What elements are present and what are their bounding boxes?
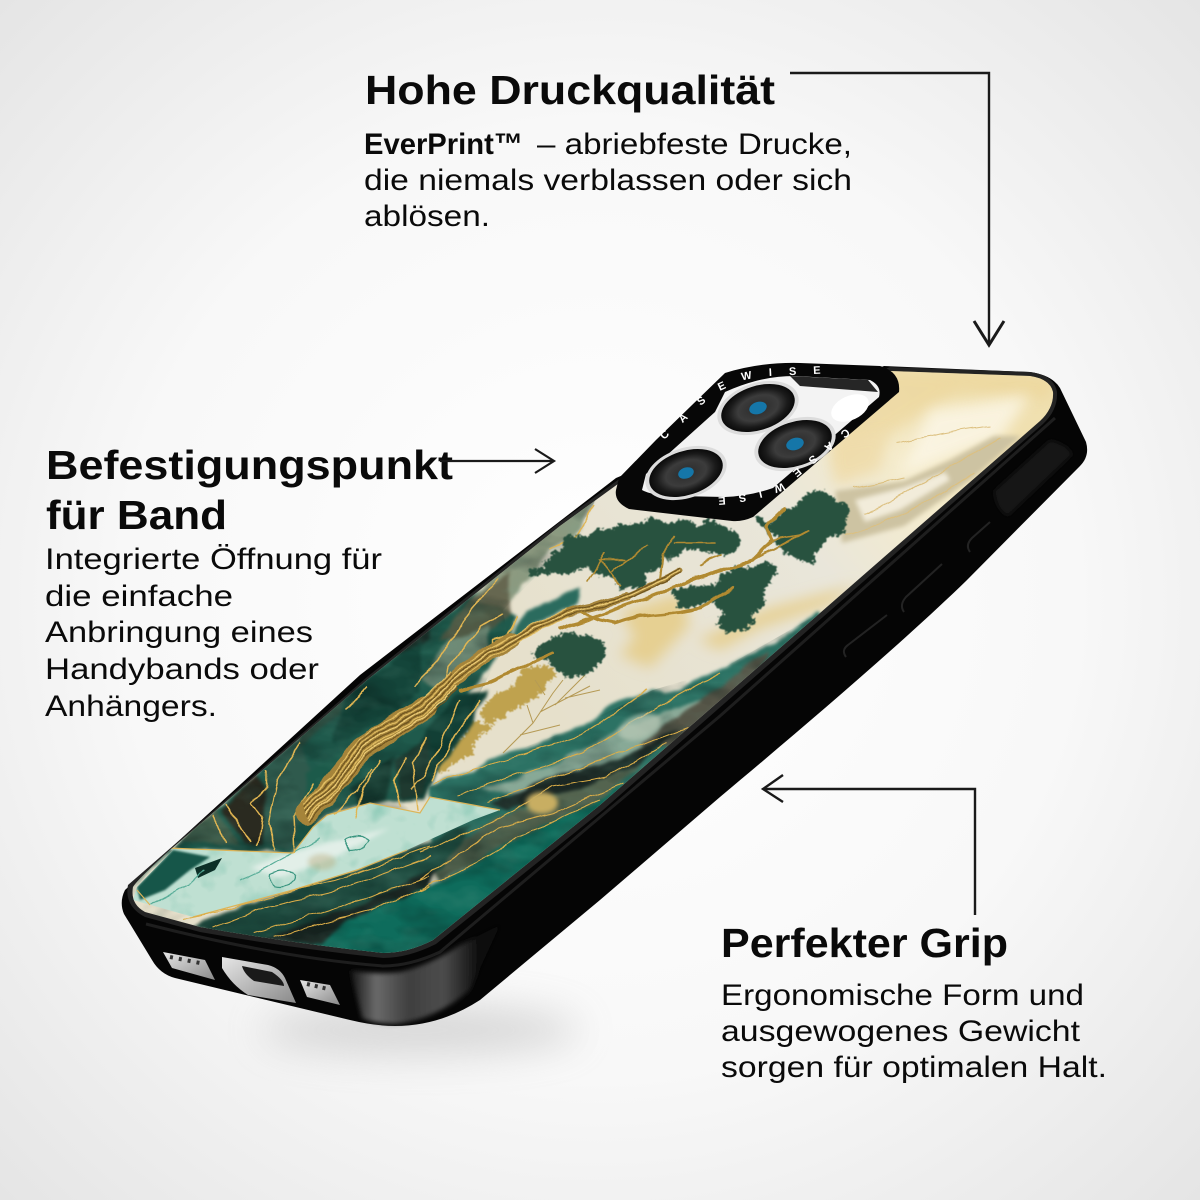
text block: band attachment description: die einfache <box>45 580 233 613</box>
text block: band attachment description: Handybands oder <box>45 653 319 686</box>
sage hill <box>480 698 702 796</box>
gold bare tree <box>503 675 600 753</box>
charging port <box>222 957 296 1003</box>
text block: EverPrint description: EverPrint™ <box>364 128 523 161</box>
rim bevel highlight <box>146 418 1055 966</box>
camera module <box>616 362 900 522</box>
brown hill <box>640 650 770 745</box>
phone face artwork <box>120 360 1070 970</box>
lens 3 <box>638 436 734 510</box>
sage ridge <box>420 625 490 690</box>
brand text top: CASEWISE <box>660 366 820 438</box>
olive peak upper <box>470 501 595 608</box>
brand text path top <box>664 373 835 440</box>
speaker grille right <box>300 980 340 1005</box>
text block: grip description: Ergonomische Form und <box>721 979 1084 1012</box>
teal lake <box>400 690 490 803</box>
tree foliage <box>530 488 849 677</box>
dark brown triangles <box>222 775 270 848</box>
speaker grille left <box>163 952 215 980</box>
river gold lines <box>183 673 720 937</box>
camera bezel <box>616 363 899 521</box>
heading: Perfekter Grip: Perfekter Grip <box>721 920 1008 966</box>
watercolor texture <box>132 500 810 953</box>
cream sky <box>120 360 1070 960</box>
gold wash patches right <box>620 584 860 668</box>
distant mountain marble <box>835 426 1021 543</box>
hill top band <box>430 612 822 850</box>
mountain base <box>133 590 519 890</box>
teal foreground <box>291 786 622 953</box>
lens 1 <box>710 371 806 445</box>
gold blot <box>526 792 558 814</box>
teal sliver <box>508 588 580 640</box>
mint band gold border <box>137 797 500 917</box>
lens 2 <box>747 407 843 481</box>
text block: band attachment description: Anbringung eines <box>45 616 313 649</box>
sage pebble <box>616 710 663 742</box>
text block: grip description: ausgewogenes Gewicht <box>721 1015 1081 1048</box>
canopy right <box>749 488 849 562</box>
text block: grip description <box>721 979 1107 1084</box>
gold wash left patches <box>431 664 557 777</box>
shadow under phone <box>260 1006 580 1054</box>
text block: band attachment description: Integrierte Öffnung für <box>45 543 382 576</box>
arrow: print quality to phone top <box>790 73 1004 345</box>
arrow: grip to phone side <box>763 775 975 915</box>
text block: EverPrint description <box>364 128 852 233</box>
text block: EverPrint description: – abriebfeste Drucke, <box>537 128 852 161</box>
camera window <box>642 376 880 497</box>
gold glow upper corner <box>840 371 1053 444</box>
hill band behind cream boundary <box>192 609 822 953</box>
arrow: band attachment to camera <box>440 449 554 473</box>
canopy left <box>530 519 742 593</box>
text block: band attachment description: Anhängers. <box>45 690 217 723</box>
deep green <box>335 640 420 745</box>
text block: EverPrint description: die niemals verblassen oder sich <box>364 164 852 197</box>
inner wall shadow <box>790 376 878 392</box>
dark band mid <box>260 868 440 945</box>
phone <box>122 362 1088 1028</box>
brand text path bottom <box>672 428 846 498</box>
gold contour lines <box>212 505 595 853</box>
side buttons <box>844 522 990 657</box>
text block: grip description: sorgen für optimalen Halt. <box>721 1051 1107 1084</box>
case rim <box>127 367 1057 958</box>
strap slot <box>994 440 1072 516</box>
dark shade upper <box>398 629 432 656</box>
text block: band attachment description <box>45 543 382 723</box>
heading: Befestigungspunkt für Band <box>46 442 453 538</box>
dark left mountains <box>125 490 600 892</box>
mint marble band <box>133 798 499 917</box>
dark stripe <box>490 728 680 810</box>
dark band left <box>190 822 470 945</box>
brand text bottom: CASEWISE <box>718 430 850 505</box>
phone case body <box>122 366 1087 1026</box>
heading: Befestigungspunkt für Band: Befestigungspunkt <box>46 442 453 488</box>
brown shade <box>440 570 510 640</box>
heading: Befestigungspunkt für Band: für Band <box>46 492 227 538</box>
gloss bottom corner <box>350 925 500 1024</box>
flash <box>827 389 873 427</box>
canopy middle <box>670 564 773 629</box>
canopy low <box>533 632 603 677</box>
olive stripe <box>430 765 640 880</box>
heading: Hohe Druckqualität: Hohe Druckqualität <box>365 67 775 113</box>
text block: EverPrint description: ablösen. <box>364 200 490 233</box>
tree trunk and branches <box>304 509 808 821</box>
